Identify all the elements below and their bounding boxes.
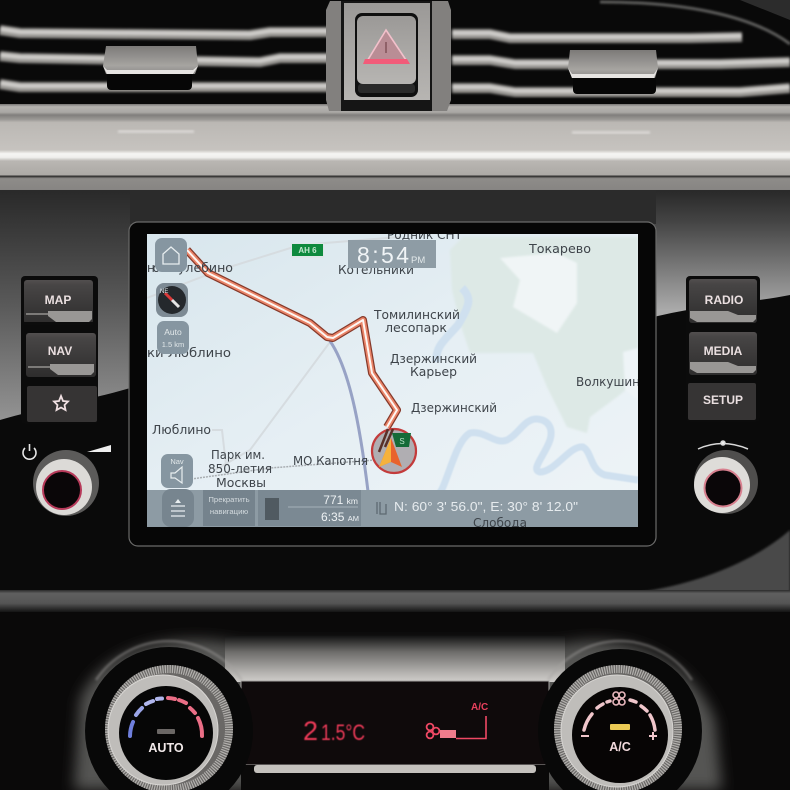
stop navigation button: Прекратить — [208, 495, 250, 504]
map labels: улебино — [178, 261, 233, 275]
trip distance and time — [258, 490, 361, 526]
map labels: Парк им. — [211, 448, 265, 462]
vent slats — [0, 29, 790, 92]
fan arc — [584, 700, 655, 730]
lower trim strip — [0, 590, 790, 612]
roads — [147, 237, 400, 482]
NAV button: NAV — [48, 344, 72, 358]
map labels: ки Люблино — [147, 346, 231, 360]
map labels: МО Капотня — [293, 454, 368, 468]
map labels: Москвы — [216, 476, 266, 490]
temperature readout: 2 — [303, 716, 318, 746]
SETUP button — [688, 383, 756, 420]
position marker — [372, 429, 416, 473]
active route — [187, 250, 397, 427]
map labels: Родник СНТ — [387, 228, 463, 242]
map labels: 850-летия — [208, 462, 272, 476]
trip distance and time: 771 km — [323, 493, 358, 507]
temperature readout — [303, 716, 365, 746]
A/C label: A/C — [609, 740, 631, 754]
AUTO label — [148, 729, 184, 755]
auto zoom button: 1.5 km — [162, 340, 184, 349]
right vent tab — [568, 50, 658, 94]
label: Слобода: Слобода — [473, 516, 527, 530]
climate control panel — [0, 612, 790, 790]
favourite button — [27, 386, 97, 422]
map labels: Томилинский — [373, 308, 460, 322]
nav volume button: Nav — [170, 457, 184, 466]
navigation screen — [147, 228, 640, 530]
clock: 8:54 — [357, 242, 409, 268]
MAP button: MAP — [45, 293, 71, 307]
left hard buttons — [21, 276, 98, 424]
auto zoom button: Auto — [164, 327, 182, 337]
icon: hazard triangle — [363, 30, 410, 64]
temperature readout: 1.5°C — [321, 720, 365, 745]
position marker: S — [399, 437, 405, 446]
screen bezel — [129, 222, 656, 546]
clock: PM — [411, 255, 425, 266]
fan level — [427, 716, 486, 738]
tune knob — [694, 450, 758, 514]
silver trim bar — [0, 104, 790, 196]
icon: flag — [377, 502, 386, 514]
auto zoom button — [157, 321, 189, 354]
map labels: Карьер — [410, 365, 457, 379]
menu button — [162, 489, 194, 527]
map labels: лесопарк — [385, 321, 447, 335]
volume knob — [33, 450, 99, 516]
hazard button housing — [326, 1, 451, 111]
A/C label — [581, 692, 657, 754]
nav volume button — [161, 454, 193, 488]
trip distance and time: 6:35 AM — [321, 510, 359, 524]
coordinates: N: 60° 3' 56.0", E: 30° 8' 12.0" — [394, 499, 578, 514]
stop navigation button: навигацию — [210, 507, 248, 516]
A/C indicator: A/C — [471, 702, 488, 713]
road sign AH6: AH 6 — [298, 246, 317, 255]
map labels: Люблино — [152, 423, 211, 437]
map labels: но — [147, 261, 160, 275]
right climate knob — [538, 649, 702, 790]
MEDIA button: MEDIA — [704, 344, 743, 358]
map labels: Котельники — [338, 263, 414, 277]
route alternative — [328, 342, 370, 490]
vent background — [0, 0, 790, 112]
icon: power — [23, 444, 36, 459]
stop navigation button — [203, 490, 255, 526]
volume scale wedge — [87, 445, 111, 452]
RADIO button — [689, 279, 757, 323]
left vent tab — [103, 46, 198, 90]
RADIO button: RADIO — [705, 293, 743, 307]
rivers — [432, 286, 638, 490]
map labels: Дзержинский — [390, 352, 477, 366]
home button — [155, 238, 187, 272]
SETUP button: SETUP — [703, 393, 743, 407]
right hard buttons — [686, 276, 760, 422]
map labels: Токарево — [528, 242, 591, 256]
map background — [147, 234, 638, 490]
centre console panel — [0, 190, 790, 592]
clock — [348, 240, 436, 268]
map labels: Дзержинский — [411, 401, 497, 415]
MAP button — [24, 280, 93, 325]
compass button — [156, 283, 188, 317]
temperature arc — [130, 698, 202, 736]
NAV button — [26, 333, 96, 377]
AUTO label: AUTO — [148, 741, 184, 755]
tune scale arc — [698, 441, 748, 449]
compass button: NE — [160, 289, 168, 295]
map labels: Волкушин — [576, 375, 640, 389]
map labels — [147, 228, 640, 490]
left climate knob — [85, 647, 253, 790]
road sign AH6 — [291, 243, 324, 258]
MEDIA button — [689, 332, 757, 375]
climate display — [241, 681, 549, 790]
bottom info bar — [147, 490, 638, 527]
forest areas — [450, 237, 638, 433]
